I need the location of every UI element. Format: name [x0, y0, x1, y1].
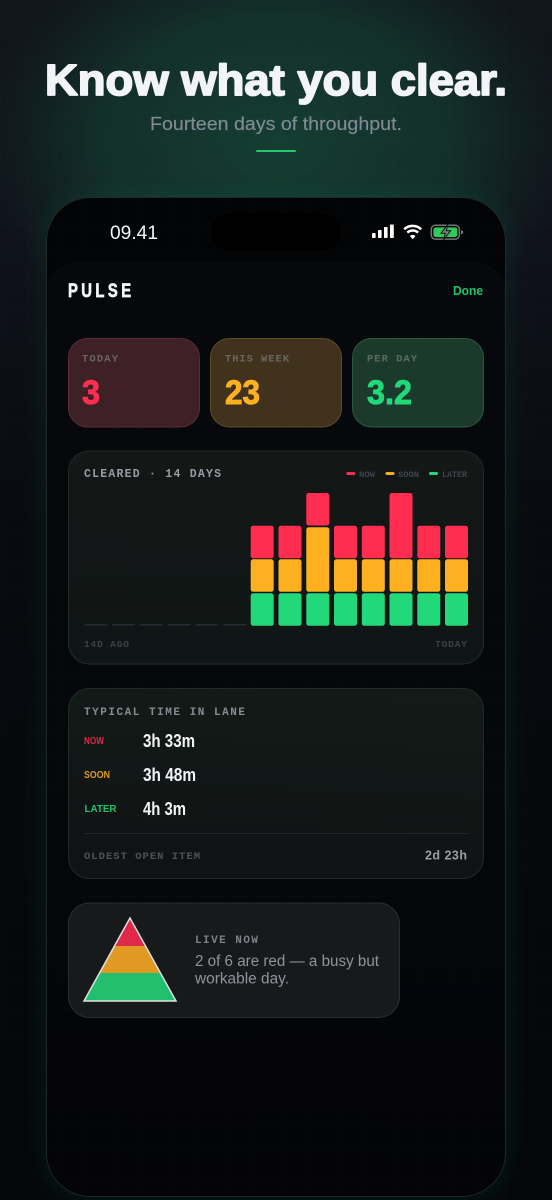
phone glow [46, 197, 506, 1197]
stat card: today [68, 338, 200, 427]
app sheet [47, 262, 505, 1196]
row: later: LATER [84, 803, 117, 815]
stat card: per day [352, 338, 484, 427]
app name: PULSE [68, 279, 131, 301]
icon: wifi [404, 226, 421, 239]
stat card: this week [210, 338, 342, 427]
axis labels: 14D AGO [84, 639, 129, 650]
header [45, 56, 507, 152]
icon: pyramid [84, 918, 176, 1001]
callout text [194, 935, 380, 988]
accent line [256, 150, 296, 152]
panel heading: TYPICAL TIME IN LANE [84, 707, 245, 719]
row: soon: SOON [84, 769, 110, 781]
row: later: 4h 3m [143, 798, 186, 819]
row: soon: 3h 48m [143, 764, 196, 785]
oldest open item: 2d 23h [425, 848, 467, 862]
row: later [84, 798, 186, 819]
subtitle: Fourteen days of throughput. [150, 113, 402, 134]
callout text: workable day. [194, 970, 289, 988]
stat card: today: 3 [82, 374, 100, 412]
icon: signal [372, 224, 394, 238]
oldest open item: OLDEST OPEN ITEM [84, 851, 200, 863]
dynamic island [211, 213, 341, 251]
axis labels [84, 639, 467, 650]
legend: NOW [359, 470, 376, 480]
axis labels: TODAY [435, 639, 467, 650]
legend: LATER [442, 470, 468, 480]
icon: charging battery [431, 224, 463, 240]
callout text: LIVE NOW [195, 935, 258, 947]
empty day markers [84, 624, 246, 626]
stat card: this week: 23 [225, 374, 260, 412]
row: soon [84, 764, 196, 785]
panel: typical time in lane [68, 688, 484, 878]
callout: live now [68, 903, 400, 1018]
callout text: 2 of 6 are red — a busy but [195, 953, 380, 970]
stat card: this week: THIS WEEK [225, 354, 290, 366]
legend [346, 470, 468, 480]
done button: Done [453, 284, 483, 298]
row: now: NOW [84, 735, 104, 747]
stat card: per day: 3.2 [367, 374, 412, 412]
panel: cleared chart [68, 451, 484, 664]
title: Know what you clear. [45, 56, 507, 105]
oldest open item [84, 848, 467, 863]
chart heading: CLEARED · 14 DAYS [84, 468, 221, 481]
stat card: today: TODAY [82, 354, 119, 366]
legend: SOON [398, 470, 419, 480]
row: now: 3h 33m [143, 730, 195, 751]
phone [46, 198, 506, 1196]
bar chart [251, 493, 468, 626]
status bar [110, 213, 463, 251]
clock: 09.41 [110, 222, 158, 244]
nav bar [68, 279, 483, 301]
row: now [84, 730, 195, 751]
stat card: per day: PER DAY [367, 354, 418, 366]
